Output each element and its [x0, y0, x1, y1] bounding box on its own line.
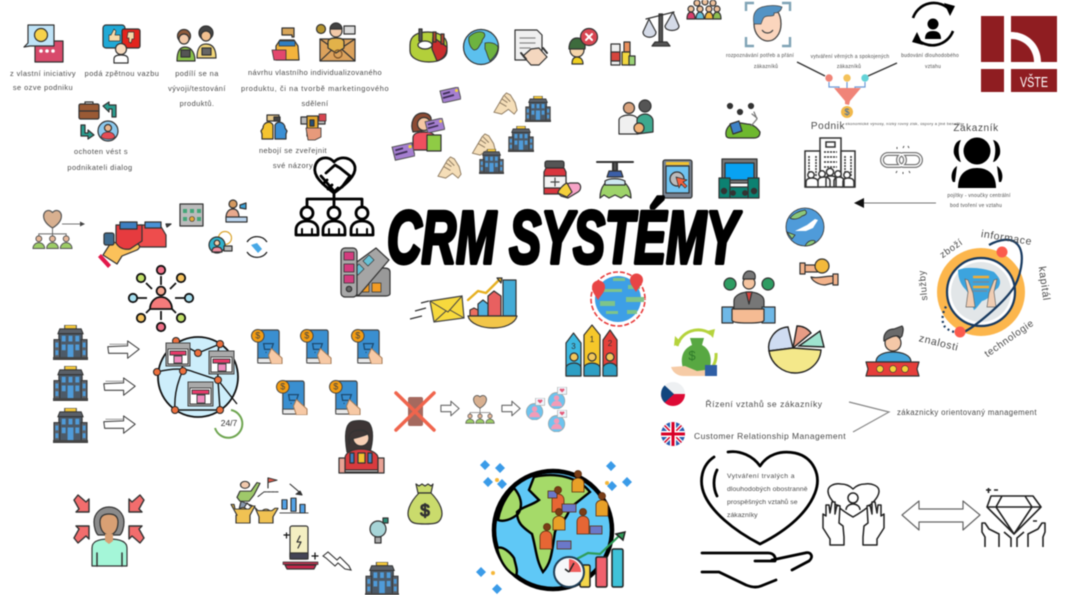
icon: customer sync cycle — [912, 3, 955, 45]
icon: satellite top left — [480, 460, 507, 489]
icon: hand with cars — [98, 222, 171, 268]
arrow: to customers — [502, 401, 520, 416]
label: služby: služby — [917, 270, 930, 301]
icon: focus on person — [74, 495, 144, 566]
logo: VŠTE: VŠTE — [1020, 74, 1048, 91]
icon: person with coin badge — [209, 232, 232, 253]
text: ochoten vést s podnikateli dialog: ochoten vést s — [74, 147, 128, 156]
icon: purple loyalty card top — [440, 87, 461, 103]
icon: ranked towers 1 2 3: 3 — [571, 342, 576, 351]
text: budování dlouhodobého vztahu: budování dlouhodobého — [901, 53, 959, 59]
icon: customer with heart top — [548, 387, 567, 409]
icon: money bag in cycle — [671, 329, 717, 376]
text: Customer Relationship Management: Customer Relationship Management — [694, 431, 846, 441]
icon: team climbing to goal — [231, 478, 308, 523]
icon: briefcase exchange — [79, 102, 118, 141]
label: kapitál: kapitál — [1036, 266, 1052, 302]
icon: colour swatches — [341, 248, 390, 297]
text: nebojí se zveřejnit své názory: nebojí se zveřejnit — [259, 146, 327, 155]
icon: office building bottom — [365, 562, 399, 595]
icon: small organisation with arrow — [33, 210, 85, 249]
icon: earth globe — [464, 30, 498, 64]
text: návrhu vlastního individualizovaného: návrhu vlastního individualizovaného — [248, 68, 382, 77]
text: podílí se na vývoji/testování: podílí se na — [175, 69, 219, 78]
icon: office building row 3 — [53, 408, 88, 443]
icon: stage with island — [726, 104, 760, 138]
icon: person with rejection mark — [569, 28, 598, 64]
icon: two testers with laptops — [177, 26, 216, 61]
icon: clasped hands middle — [472, 134, 496, 155]
icon: office building lower — [479, 149, 504, 174]
icon: hands holding customer heart — [823, 484, 884, 545]
icon: Czech flag — [661, 382, 685, 406]
icon: exchange ring — [937, 240, 1025, 338]
icon: satellite top right — [605, 461, 632, 491]
text: z vlastní iniciativy: se ozve podniku — [13, 83, 73, 92]
icon: tablet cursor — [663, 160, 692, 198]
text: podílí se na vývoji/testování: vývoji/testování — [168, 84, 226, 93]
icon: money bag in cycle: $ — [688, 348, 696, 363]
icon: car and paint brush — [272, 28, 299, 60]
text: ochoten vést s podnikateli dialog: podnikateli dialog — [67, 163, 133, 172]
icon: satellite bottom left — [476, 567, 502, 594]
arrow row 1 — [108, 341, 139, 358]
arrow: to organisation — [441, 401, 459, 416]
icon: pie chart with people — [410, 29, 447, 62]
text: Řízení vztahů se zákazníky: Řízení vztahů se zákazníky — [706, 399, 823, 409]
text: nebojí se zveřejnit své názory: své názory — [273, 161, 313, 170]
icon: ranked towers 1 2 3 — [566, 325, 617, 376]
text: centrální bod tvoření ve vztahu: bod tvoření ve vztahu — [950, 203, 1002, 209]
text: ekonomické výnosy: ekonomické výnosy, nízký rovný zisk, úspory a jiné benefity — [846, 121, 962, 126]
icon: company building black — [805, 138, 855, 187]
icon: ranked towers 1 2 3: 2 — [608, 339, 613, 348]
icon: customer with heart left — [526, 398, 545, 420]
icon: balance scales — [643, 12, 679, 46]
icon: coin between hands — [800, 259, 838, 285]
arrow: customer to firm — [854, 198, 936, 208]
label: Zákazník: Zákazník — [953, 123, 999, 134]
icon: world globe with remote workers — [494, 470, 612, 589]
title: CRM SYSTÉMY — [387, 196, 742, 279]
icon: assembly worker — [226, 200, 247, 222]
icon: idea bulb — [370, 518, 388, 543]
arrow: double headed — [902, 501, 980, 530]
icon: woman with sofa — [339, 421, 384, 473]
icon: globe with plane — [786, 208, 824, 246]
text: vytváření věrných a spokojených zákazníků: vytváření věrných a spokojených — [811, 54, 889, 60]
icon: woman shopping — [412, 113, 441, 151]
icon: city growth bowl — [468, 278, 517, 328]
icon: phone falling — [283, 526, 318, 569]
icon: flying envelope — [410, 296, 464, 322]
text: vytváření trvalých vztahů: zákazníky — [727, 512, 758, 519]
text: z vlastní iniciativy: z vlastní iniciativy — [10, 69, 76, 78]
icon: ceiling lamp / drone — [597, 162, 633, 198]
icon: small organisation centre — [466, 395, 494, 423]
icon: UK flag — [661, 422, 685, 446]
text: vytváření trvalých vztahů: prospěšných vztahů se — [727, 498, 798, 506]
icon: chain link — [882, 146, 921, 174]
text: zákaznicky orientovaný management: zákaznicky orientovaný management — [897, 408, 1037, 417]
logo: VŠTE — [981, 16, 1057, 92]
icon: big heart on hand — [702, 452, 817, 587]
text: podá zpětnou vazbu: podá zpětnou vazbu — [85, 69, 159, 78]
connector: two names into one — [849, 402, 889, 432]
diagram: funnel to profit: $ — [844, 107, 850, 117]
icon: customer with heart bottom — [548, 410, 567, 432]
icon: customer hub network — [129, 266, 193, 331]
icon: customer face in focus frame — [746, 3, 790, 46]
icon: tag refresh cycle — [247, 237, 267, 257]
label: informace: informace — [980, 228, 1033, 248]
label: technologie: technologie — [983, 318, 1036, 360]
text: vytváření trvalých vztahů: Vytváření trvalých a — [727, 473, 795, 480]
text: budování dlouhodobého vztahu: vztahu — [925, 64, 941, 70]
text: rozpoznávání potřeb a přání zákazníků: rozpoznávání potřeb a přání — [726, 53, 794, 59]
icon: clasped hands top — [494, 93, 517, 114]
text: podílí se na vývoji/testování: produktů. — [180, 99, 214, 108]
icon: businessman with coins — [722, 271, 775, 323]
icon: mobile shop 1 — [251, 330, 282, 364]
icon: mobile shop 4 — [276, 381, 307, 415]
text: centrální bod tvoření ve vztahu: pojítky - vnoučky centrální — [947, 193, 1011, 199]
label: Podnik: Podnik — [811, 121, 845, 132]
icon: crossed out phone — [396, 393, 434, 430]
icon: office building top — [525, 96, 551, 122]
icon: mobile shop 5 — [329, 381, 360, 415]
icon: office building middle — [508, 126, 534, 152]
icon: customers black silhouette — [952, 138, 1002, 188]
icon: speaking heads and phone — [261, 114, 326, 140]
icon: office building row 1 — [53, 325, 88, 360]
icon: TV with speakers — [719, 159, 759, 198]
icon: medicine bottle and pill — [544, 161, 581, 198]
icon: connected e-shop globe — [154, 337, 242, 438]
icon: person with star rating — [866, 326, 919, 376]
icon: contract with handshake — [515, 30, 547, 65]
icon: bottles — [611, 42, 635, 65]
icon: hands with diamond — [982, 488, 1045, 547]
icon: ranked towers 1 2 3: 1 — [590, 335, 595, 344]
icon: connected e-shop globe: 24/7 — [221, 418, 238, 428]
label: znalosti: znalosti — [918, 332, 960, 354]
text: návrhu vlastního individualizovaného: sdělení — [302, 99, 329, 108]
icon: green dashboard — [180, 204, 203, 226]
icon: chat bubbles with smile — [24, 25, 63, 62]
icon: money bag — [408, 484, 442, 524]
icon: like and dislike feedback — [103, 25, 140, 63]
icon: mobile shop 2 — [300, 330, 331, 364]
icon: growth bars and stopwatch — [554, 532, 625, 587]
icon: person in envelope — [316, 23, 355, 61]
icon: purple loyalty card bottom — [392, 143, 415, 160]
icon: mobile shop 3 — [351, 330, 382, 364]
icon: crowd of people — [687, 0, 721, 19]
icon: black handshake organisation — [296, 158, 373, 235]
text: návrhu vlastního individualizovaného: produktu, či na tvorbě marketingového — [241, 84, 389, 93]
icon: purple loyalty card in hand — [425, 118, 445, 133]
arrow row 3 — [104, 416, 135, 433]
icon: globe with pins — [591, 272, 645, 326]
icon: office building row 2 — [53, 366, 88, 401]
arrow row 2 — [104, 378, 135, 395]
diagram: funnel to profit — [797, 62, 897, 118]
icon: clasped hands bottom — [438, 157, 461, 178]
icon: pie chart — [769, 326, 824, 373]
text: vytváření trvalých vztahů: dlouhodobých obostranně — [727, 486, 808, 493]
text: rozpoznávání potřeb a přání zákazníků: zákazníků — [754, 63, 778, 70]
icon: doctor pair — [619, 100, 653, 134]
text: vytváření věrných a spokojených zákazníků: zákazníků — [837, 63, 861, 70]
icon: money bag: $ — [420, 501, 430, 520]
label: zboží: zboží — [938, 237, 965, 261]
arrow: downward zigzag — [323, 552, 351, 570]
